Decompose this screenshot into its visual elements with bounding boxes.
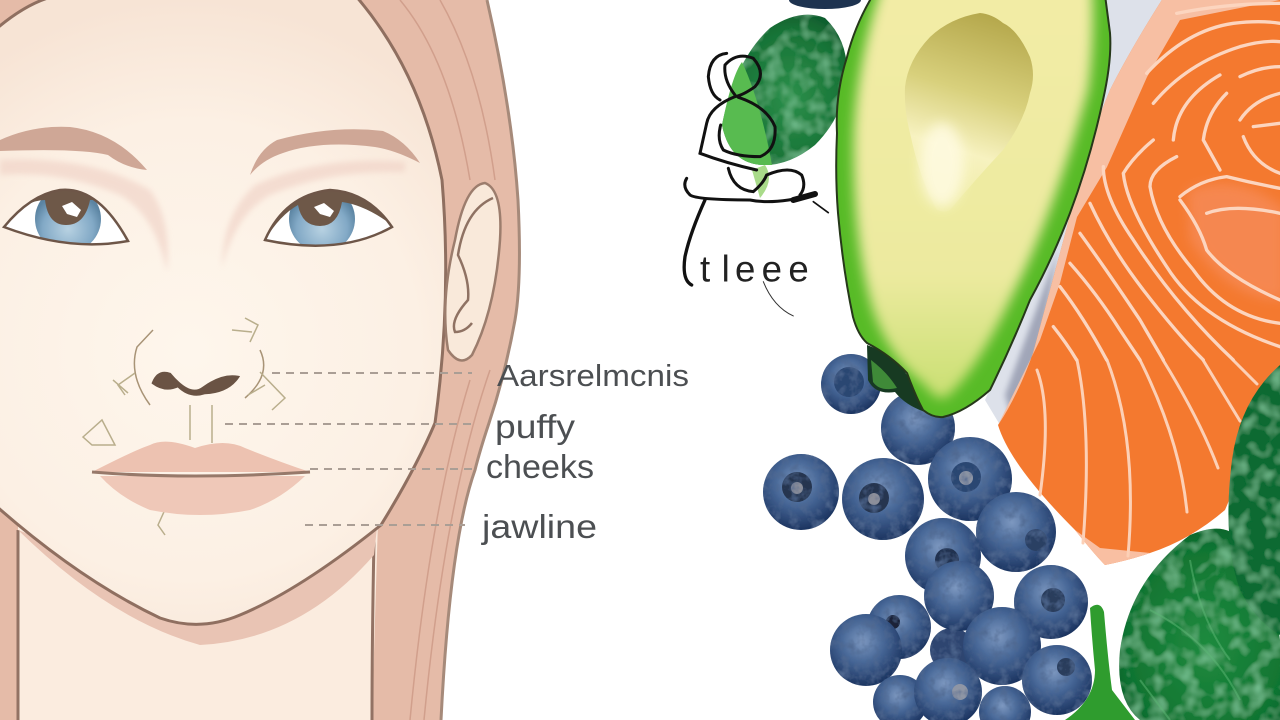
- spinach leaf: top: [722, 15, 847, 198]
- left eyebrow: [0, 127, 147, 170]
- avocado half: [830, 0, 1115, 425]
- jaw shadow: [18, 500, 380, 645]
- nose: [134, 330, 264, 405]
- callout lines: [225, 373, 472, 525]
- label: jawline: jawline: [481, 508, 597, 545]
- avocado flesh: [854, 0, 1093, 398]
- soft food shadows: [985, 0, 1165, 425]
- left eye: [2, 188, 130, 246]
- label: cheeks: cheeks: [486, 448, 594, 485]
- lips: [92, 442, 310, 515]
- avocado pit hollow: [905, 13, 1033, 212]
- right eyebrow: [250, 129, 420, 175]
- neck: [18, 520, 378, 720]
- label: top: Aarsrelmcnis: [497, 358, 689, 393]
- spinach leaf: bottom right: [1119, 529, 1280, 720]
- label: puffy: puffy: [495, 408, 576, 445]
- ear: [445, 183, 500, 360]
- spinach stem: [1065, 605, 1135, 720]
- skin cracks: [83, 318, 285, 535]
- sketch figure with text: [684, 53, 828, 316]
- illustration: woman's face: [0, 0, 519, 720]
- spinach leaf: right: [1228, 365, 1280, 635]
- blueberry at top edge: [789, 0, 861, 9]
- salmon pale rim: [998, 0, 1280, 425]
- avocado stem remnant: [867, 345, 925, 412]
- sketch caption: tleee: [700, 249, 809, 290]
- hair: [0, 0, 519, 720]
- face: [0, 0, 446, 624]
- labels: [481, 358, 689, 545]
- right eye: [265, 186, 392, 252]
- salmon fillet: [998, 0, 1280, 565]
- brow and nose shading: [0, 159, 405, 272]
- blueberries: [763, 354, 1092, 720]
